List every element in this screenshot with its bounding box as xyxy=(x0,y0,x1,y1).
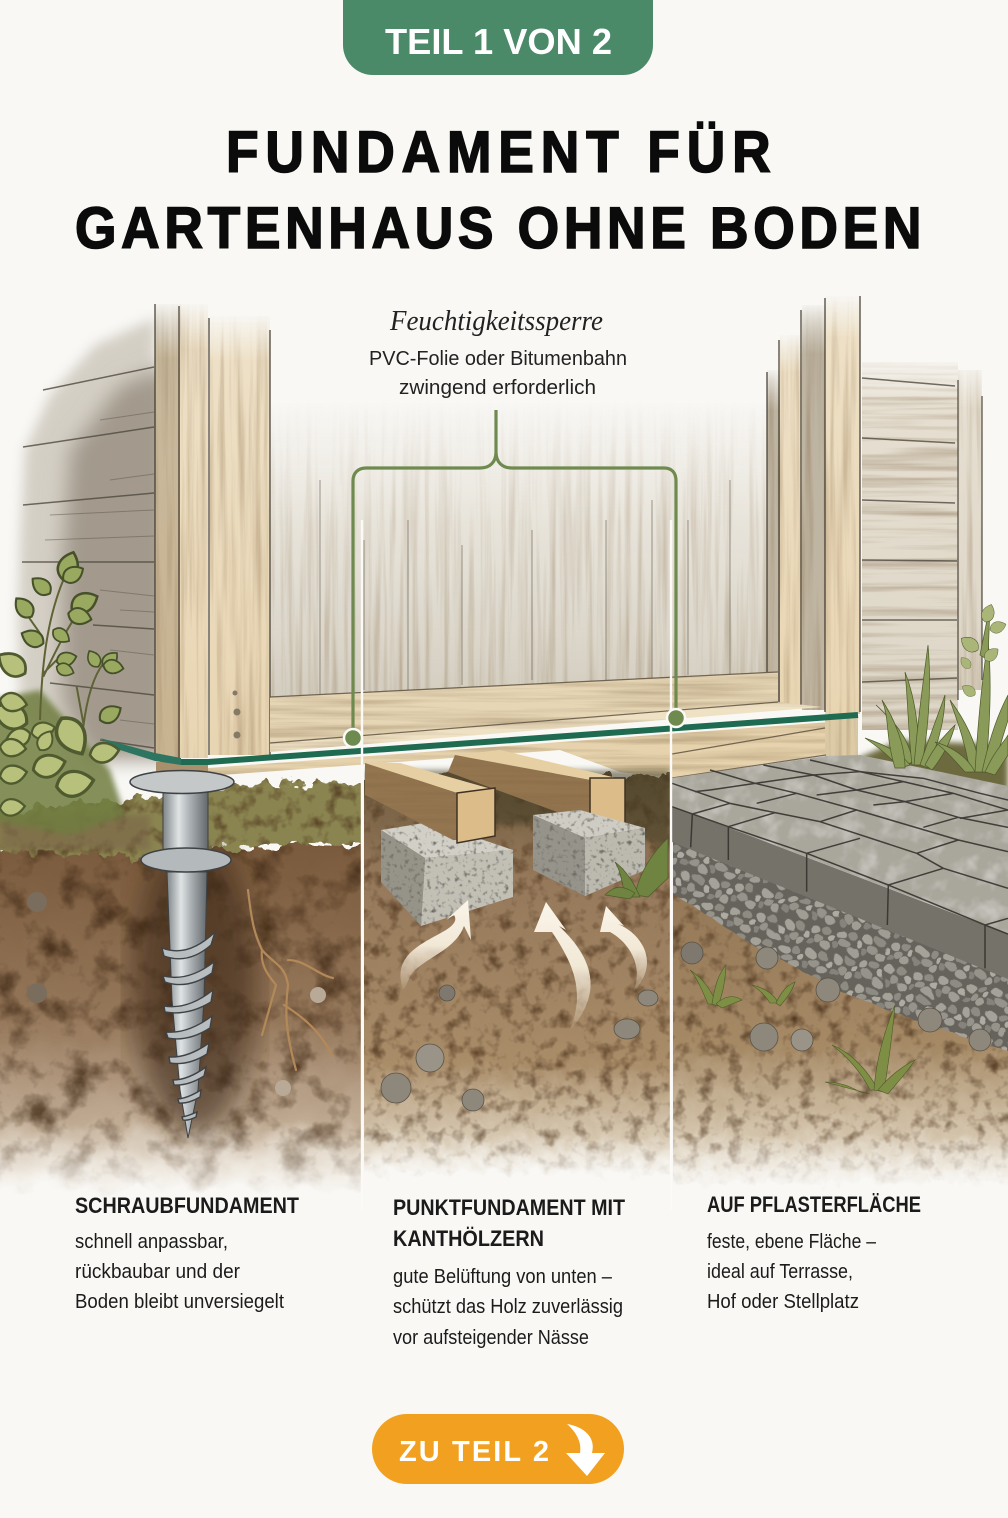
upper flange xyxy=(130,770,234,794)
text block: Auf Pflasterfläche xyxy=(707,1192,921,1313)
arrow: rising air right xyxy=(600,906,647,992)
illustration: garden house foundation cross-section xyxy=(0,296,1008,1210)
text block: Punktfundament: KANTHÖLZERN xyxy=(393,1226,544,1251)
paving stones xyxy=(672,755,1008,979)
screw helix xyxy=(162,932,215,1120)
button: Zu Teil 2: ZU TEIL 2 xyxy=(399,1436,549,1468)
text block: Punktfundament: schützt das Holz zuverlässig xyxy=(393,1296,623,1318)
ground behind paving, right xyxy=(858,740,1008,800)
floor joists: beam 2 xyxy=(448,750,625,824)
button: Zu Teil 2 xyxy=(372,1414,624,1484)
badge: Teil 1 von 2: TEIL 1 VON 2 xyxy=(385,21,612,62)
tree roots xyxy=(248,890,333,1070)
concrete block 1 xyxy=(381,822,513,926)
plant: left shrub xyxy=(0,549,125,835)
floor joists: beam 1 xyxy=(365,763,495,843)
plant: grass at block xyxy=(605,838,668,899)
concrete block 2 xyxy=(533,810,645,896)
text block: Schraubfundament xyxy=(75,1193,299,1313)
arrow: rising air left xyxy=(401,900,471,990)
text block: Schraubfundament: Boden bleibt unversiegelt xyxy=(75,1291,284,1313)
left wall planks xyxy=(18,318,170,760)
callout text: Feuchtigkeitssperre xyxy=(369,306,627,399)
title: FUNDAMENT FÜR xyxy=(226,120,771,184)
ground cover: moss left xyxy=(0,782,400,858)
callout text: Feuchtigkeitssperre: Feuchtigkeitssperre xyxy=(389,306,603,337)
text block: Punktfundament: gute Belüftung von unten – xyxy=(393,1266,613,1288)
right wall planks xyxy=(862,362,982,730)
text block: Schraubfundament: rückbaubar und der xyxy=(75,1261,240,1283)
title: GARTENHAUS OHNE BODEN xyxy=(75,196,921,260)
plant: right shrub leaves xyxy=(957,602,1008,699)
text block: Schraubfundament: SCHRAUBFUNDAMENT xyxy=(75,1193,299,1218)
text block: Auf Pflasterfläche: AUF PFLASTERFLÄCHE xyxy=(707,1192,921,1217)
arrow: rising air centre xyxy=(534,902,591,1030)
section dividers xyxy=(362,520,671,1210)
callout text: Feuchtigkeitssperre: zwingend erforderlich xyxy=(399,376,596,399)
screw shaft xyxy=(167,872,207,1138)
paver side faces xyxy=(672,806,1008,979)
stones on soil xyxy=(381,942,991,1111)
soil: left section xyxy=(0,841,361,1195)
plant: small tufts in gravel soil xyxy=(690,965,915,1094)
right posts xyxy=(767,296,860,714)
left stones xyxy=(27,892,326,1096)
icon: curved down arrow xyxy=(566,1424,605,1476)
text block: Auf Pflasterfläche: Hof oder Stellplatz xyxy=(707,1291,859,1313)
ground screw xyxy=(130,770,234,1138)
screw tube xyxy=(163,790,208,856)
badge: Teil 1 von 2 xyxy=(343,0,653,75)
text block: Schraubfundament: schnell anpassbar, xyxy=(75,1231,228,1253)
left posts xyxy=(155,304,270,758)
plant: right grass clumps xyxy=(865,605,1008,775)
gravel bed xyxy=(660,835,1008,1055)
soil: middle section xyxy=(364,766,670,1178)
callout bracket xyxy=(344,410,685,747)
text block: Punktfundament xyxy=(393,1195,625,1349)
text block: Punktfundament: vor aufsteigender Nässe xyxy=(393,1327,589,1349)
sill beams xyxy=(156,672,858,779)
moisture barrier film xyxy=(100,715,858,765)
callout text: Feuchtigkeitssperre: PVC-Folie oder Bitumenbahn xyxy=(369,347,627,370)
title xyxy=(75,120,921,260)
text block: Punktfundament: PUNKTFUNDAMENT MIT xyxy=(393,1195,625,1220)
text block: Auf Pflasterfläche: ideal auf Terrasse, xyxy=(707,1261,853,1283)
paver top surface xyxy=(672,755,1008,934)
lower flange xyxy=(141,848,231,872)
back wall boards xyxy=(270,400,780,705)
soil: right section xyxy=(673,894,1008,1184)
text block: Auf Pflasterfläche: feste, ebene Fläche – xyxy=(707,1231,877,1253)
